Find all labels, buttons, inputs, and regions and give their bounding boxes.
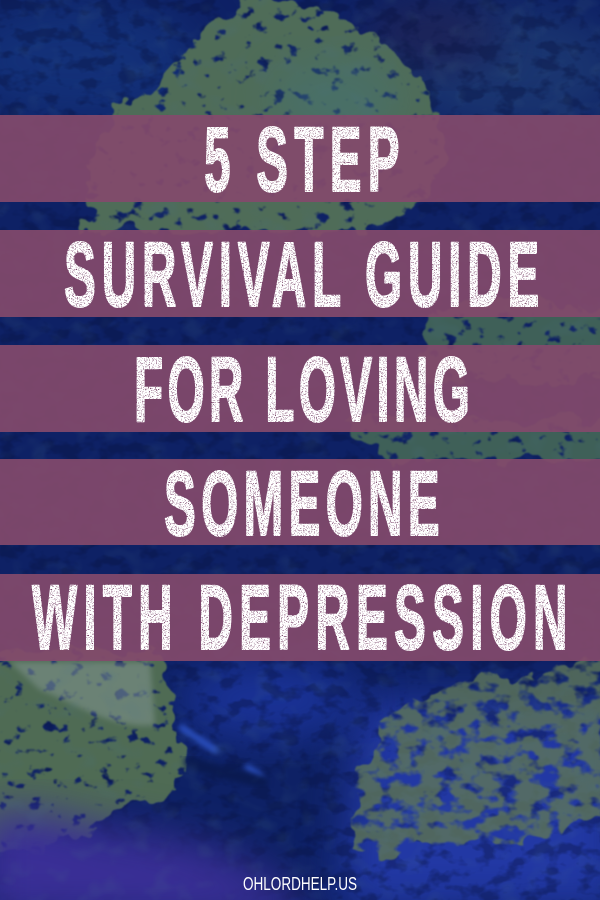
background: blue highlight strokes [182,728,260,776]
background: top centre green blob [85,0,443,232]
heading: WITH DEPRESSION: WITH DEPRESSION [32,566,568,669]
background: bottom left purple wash [0,812,300,900]
background: dark smear [190,762,262,782]
band: line 5 [0,566,600,669]
background: lower left pale highlight [10,662,155,726]
background: top left blue wash [0,0,200,120]
heading: 5 STEP: 5 STEP [204,108,400,211]
footer credit: OHLORDHELP.US: OHLORDHELP.US [243,874,357,894]
background: top right dark plum patch [360,0,500,70]
band: line 4 [0,452,600,555]
heading: SURVIVAL GUIDE: SURVIVAL GUIDE [64,223,539,326]
background: middle right green patch [345,300,600,460]
background: lower right green patches [349,664,600,853]
background: top centre teal tint [270,60,400,140]
background: lower centre blue field [180,660,360,740]
heading: SOMEONE: SOMEONE [164,452,440,555]
band: line 1 [0,108,600,211]
background: top right slate wash [400,10,600,130]
band: line 3 [0,338,600,441]
band: line 2 [0,223,600,326]
background: lower left green blob [0,650,180,850]
heading: FOR LOVING: FOR LOVING [134,338,470,441]
background: lower right blue field [340,700,600,900]
